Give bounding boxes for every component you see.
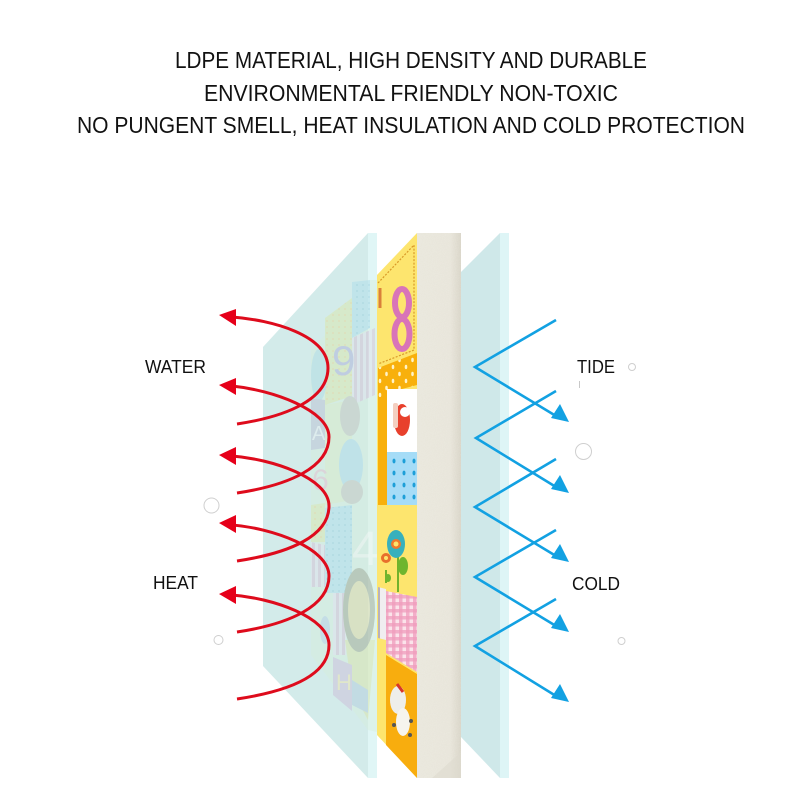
patch: orange strip xyxy=(378,397,387,505)
lion xyxy=(343,568,375,720)
title xyxy=(77,47,745,138)
faded mat print seen through the film: H xyxy=(336,670,352,695)
faded mat print seen through the film: 6 xyxy=(312,464,329,497)
patch: orange zebra tile xyxy=(386,655,417,778)
patch: flowers xyxy=(378,505,417,597)
patch: number 8 xyxy=(378,245,414,364)
label: tide: TIDE xyxy=(577,357,615,377)
arrow 2 xyxy=(219,378,329,493)
label: cold: COLD xyxy=(572,574,620,594)
label: water: WATER xyxy=(145,357,206,377)
decorative small circles xyxy=(204,364,636,644)
title: NO PUNGENT SMELL, HEAT INSULATION AND COLD PROTECTION xyxy=(77,112,745,138)
patch: grey stripes xyxy=(378,587,386,640)
panel: foam core xyxy=(417,233,461,778)
arrow 5 xyxy=(219,586,329,699)
title: ENVIRONMENTAL FRIENDLY NON-TOXIC xyxy=(204,80,618,106)
patch: pink plaid xyxy=(386,591,417,672)
panel: right glass film layer xyxy=(461,233,509,778)
chart: red heat and water arrows going out xyxy=(219,309,329,699)
arrow 4 xyxy=(475,530,569,632)
faded mat print seen through the film: 9 xyxy=(332,337,355,384)
patch: red panda tile xyxy=(387,389,417,453)
faded mat print seen through the film: A xyxy=(312,423,326,445)
arrow 2 xyxy=(476,391,569,493)
arrow 5 xyxy=(475,599,569,702)
title: LDPE MATERIAL, HIGH DENSITY AND DURABLE xyxy=(175,47,647,73)
panel: printed play mat face xyxy=(377,233,417,778)
faded mat print seen through the film: 4 xyxy=(352,523,379,576)
arrow 1 xyxy=(219,309,328,424)
patch: blue dots xyxy=(387,452,417,505)
chart: blue tide and cold arrows going in xyxy=(475,320,569,702)
panel: left glass film layer xyxy=(263,233,379,778)
arrow 3 xyxy=(219,447,329,561)
arrow 4 xyxy=(219,515,329,632)
arrow 1 xyxy=(475,320,569,422)
label: heat: HEAT xyxy=(153,573,198,593)
patch: orange dots xyxy=(378,353,417,399)
arrow 3 xyxy=(475,459,569,562)
faded mat print seen through the film xyxy=(311,280,379,732)
